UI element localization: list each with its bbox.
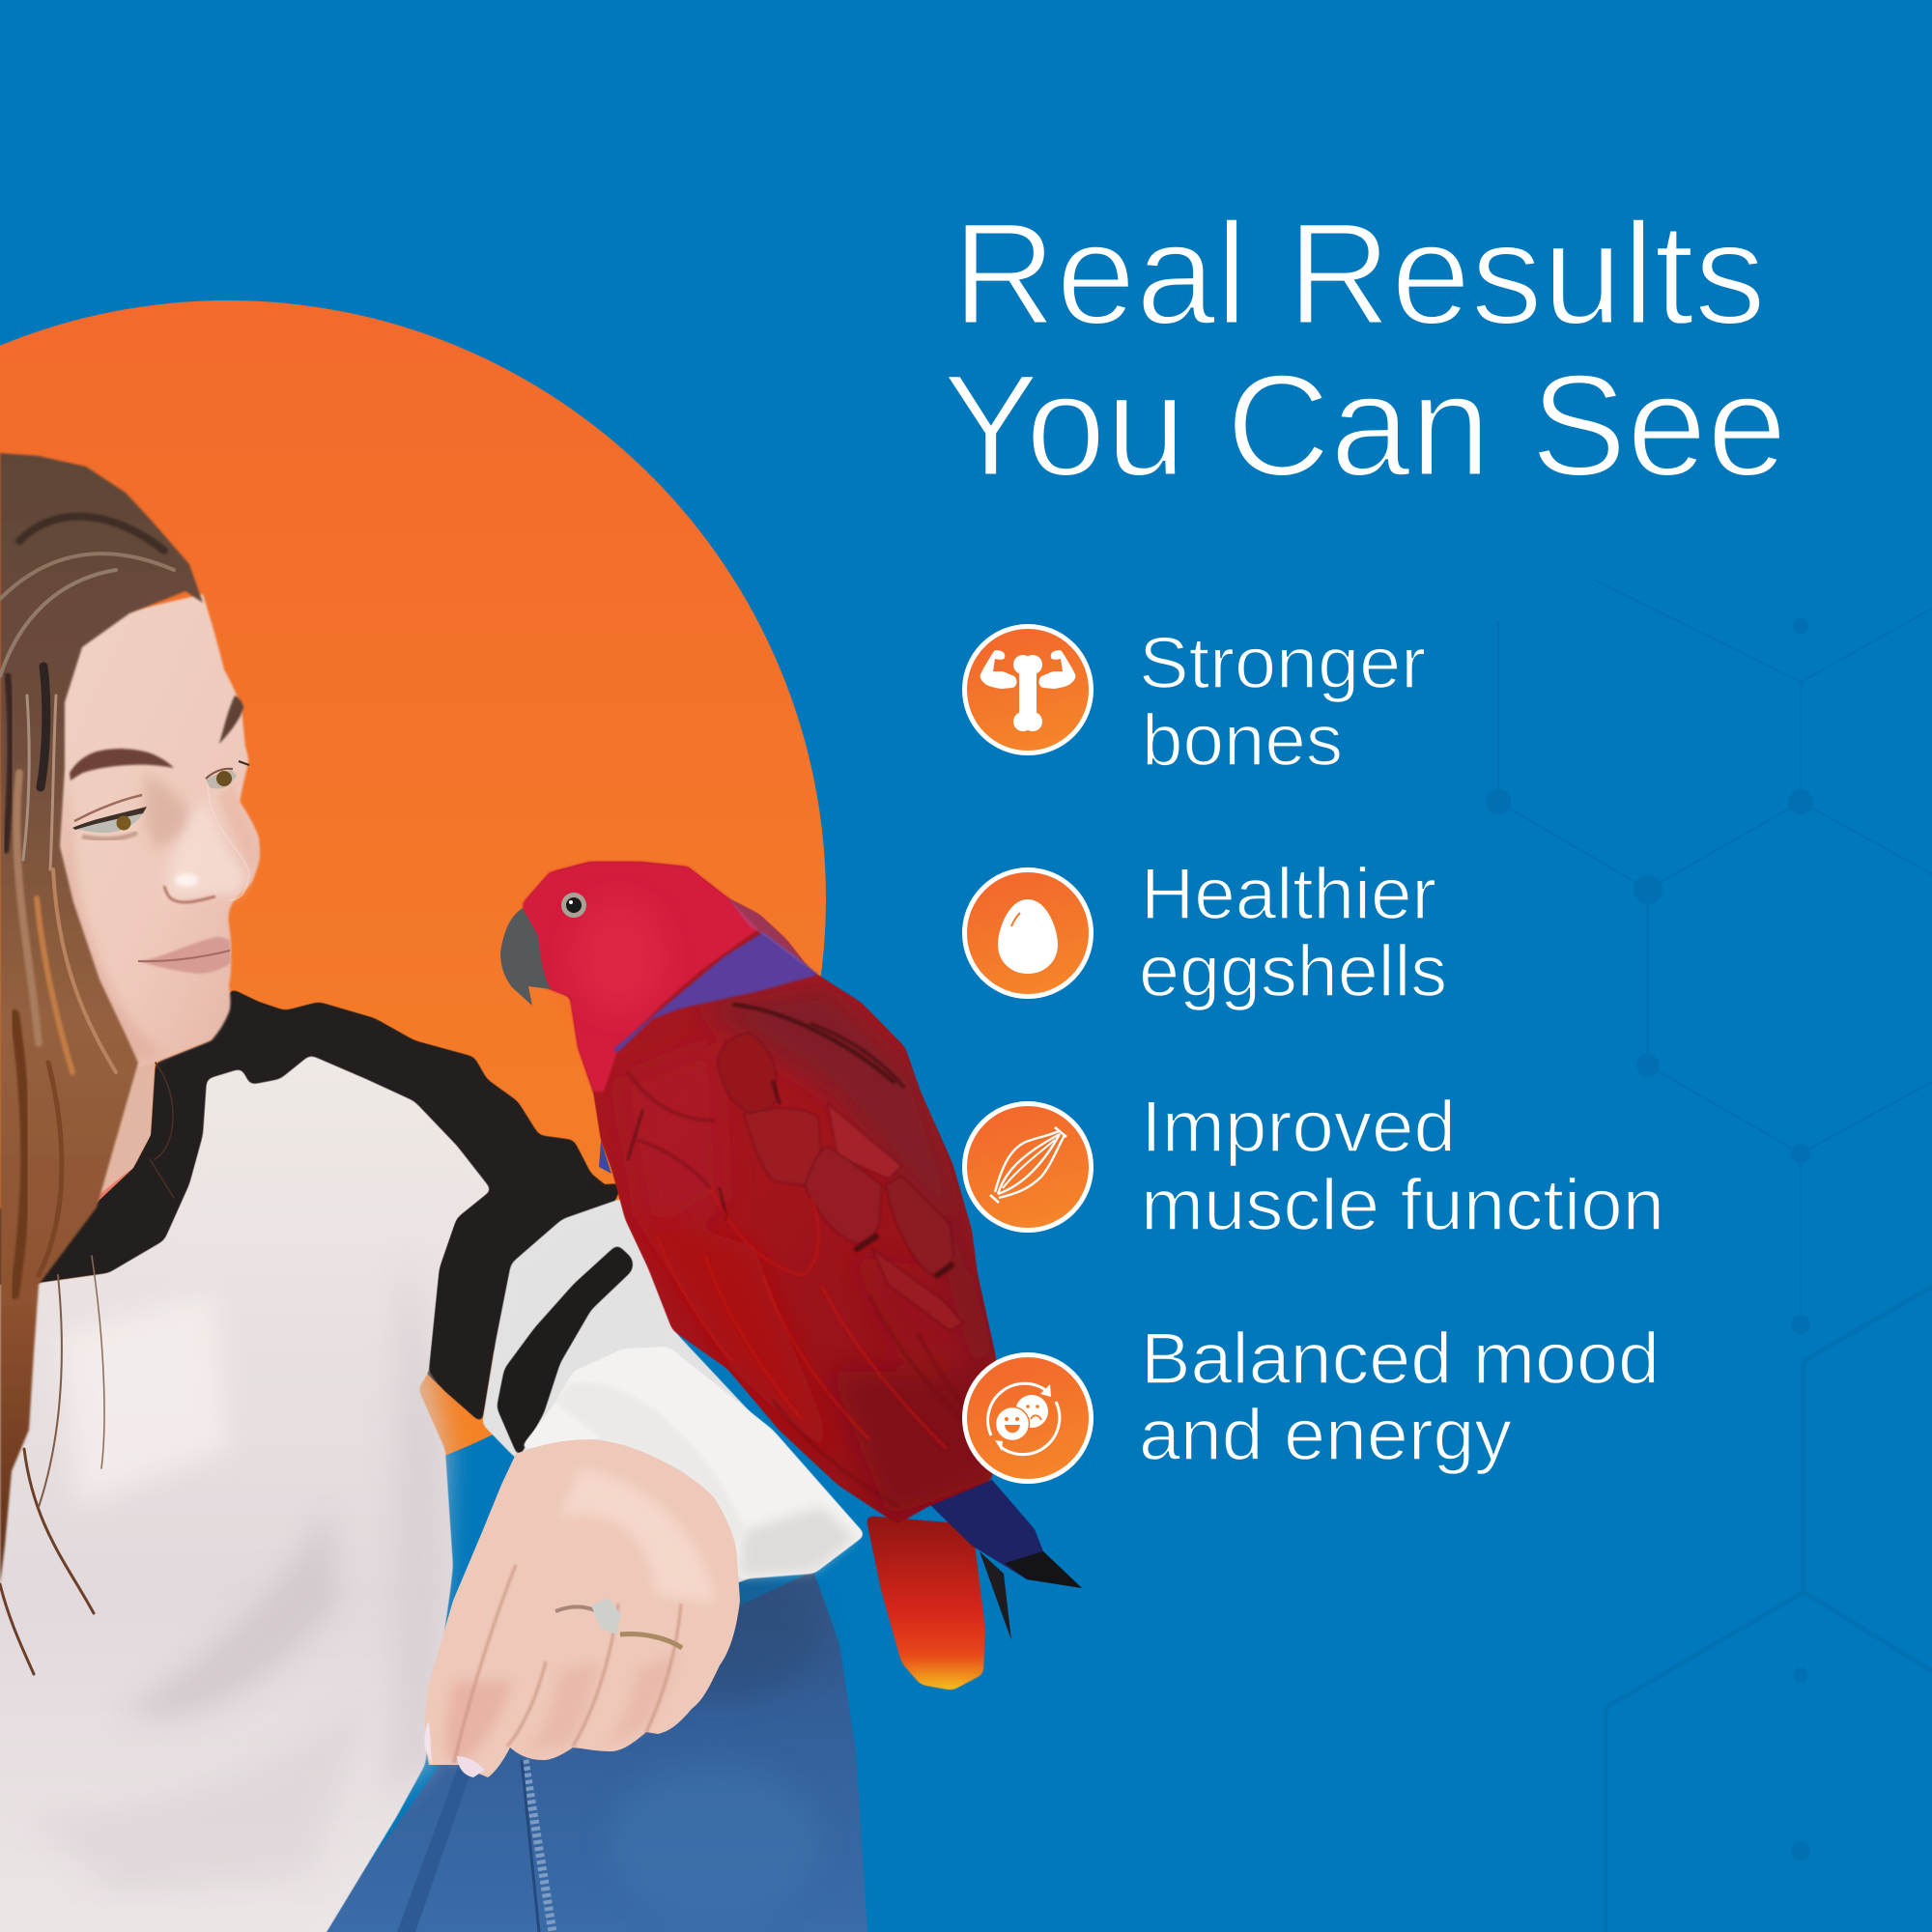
woman with raised arm (0, 453, 867, 1932)
nape spiky feather tips (727, 897, 818, 975)
facial features (58, 696, 257, 1067)
neck (19, 1014, 156, 1235)
label: balanced mood and energy: and energy (1139, 1394, 1513, 1475)
icon: muscle fibres (964, 1103, 1092, 1231)
benefit: stronger bones (964, 622, 1426, 781)
chest blue patch (599, 1141, 611, 1174)
sweatshirt white body (0, 1055, 492, 1932)
jeans (319, 1565, 867, 1932)
face (39, 594, 260, 1072)
tail feathers (866, 1516, 985, 1690)
dark feather gaps (628, 1005, 952, 1275)
label: stronger bones: Stronger (1139, 622, 1426, 703)
hair (0, 453, 203, 1584)
label: healthier eggshells: eggshells (1139, 930, 1447, 1011)
sweatshirt black raglan and collar (0, 988, 618, 1389)
label: balanced mood and energy: Balanced mood (1141, 1318, 1660, 1399)
large wing feathers (718, 1034, 963, 1330)
hand with rings (424, 1439, 740, 1777)
hair strands (0, 517, 174, 1674)
label: healthier eggshells: Healthier (1141, 853, 1436, 934)
benefit: balanced mood and energy (964, 1318, 1660, 1482)
orange circle (0, 300, 826, 1496)
title: Real Results (952, 192, 1766, 355)
sleeve thin black stripe (497, 1244, 633, 1459)
label: improved muscle function: Improved (1141, 1086, 1456, 1167)
title: You Can See (943, 344, 1787, 506)
lower feather streaks (657, 1188, 947, 1449)
parrot body (523, 862, 996, 1524)
icon: bone and muscles (964, 626, 1092, 753)
title (943, 192, 1787, 506)
benefit: improved muscle function (964, 1086, 1664, 1245)
label: improved muscle function: muscle function (1141, 1164, 1664, 1245)
purple nape (613, 932, 818, 1053)
grey beak (500, 908, 552, 1006)
faint hexagon network pattern (1486, 580, 1932, 1932)
black tail sliver (980, 1551, 1011, 1640)
sleeve black band (429, 1183, 623, 1424)
sweatshirt soft shading (29, 1256, 446, 1893)
parrot eye (561, 893, 586, 918)
sleeve white stripe (482, 1198, 866, 1584)
sweatshirt cuff (519, 1347, 866, 1579)
icon: egg (964, 869, 1092, 997)
red eclectus parrot (500, 862, 1082, 1690)
red head (523, 862, 758, 1092)
benefit: healthier eggshells (964, 853, 1447, 1011)
blue tail feathers (927, 1480, 1082, 1588)
label: stronger bones: bones (1142, 699, 1343, 781)
feather detail, clipped to body (618, 985, 1005, 1517)
icon: mood cycle faces (964, 1354, 1092, 1482)
